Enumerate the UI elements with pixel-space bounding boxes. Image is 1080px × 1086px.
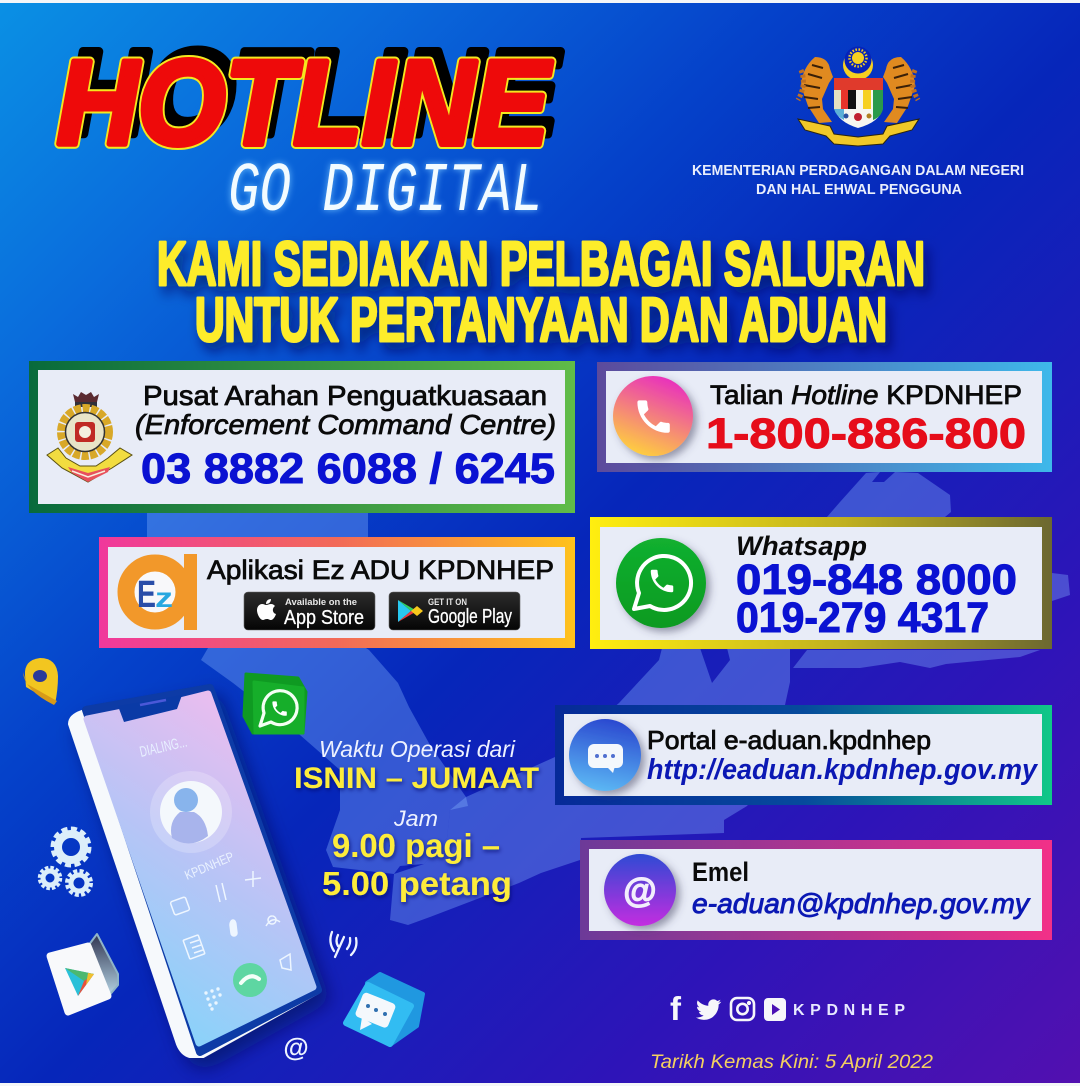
- icon: facebook: f: [670, 990, 682, 1027]
- text: centre name: Pusat Arahan Penguatkuasaan: [143, 380, 547, 411]
- text: phone numbers: 03 8882 6088 / 6245: [141, 445, 555, 493]
- text: contact name: KPDNHEP: [182, 849, 236, 883]
- icon: twitter: [696, 999, 721, 1020]
- icon: location pin: [23, 658, 58, 705]
- badge: App Store: Available on the: [285, 597, 357, 607]
- icon: email circle: [604, 854, 676, 926]
- icon: Ez ADU logo: E: [137, 574, 156, 616]
- operating hours: [294, 736, 539, 902]
- text: Jam: Jam: [393, 806, 438, 831]
- text: WhatsApp number two: 019-279 4317: [736, 594, 989, 642]
- text: WhatsApp number one: 019-848 8000: [736, 556, 1017, 604]
- icon: WhatsApp circle: [616, 538, 706, 628]
- ministry name: DAN HAL EHWAL PENGGUNA: [756, 182, 963, 198]
- icon: chat cube: [346, 974, 423, 1045]
- icon: Ez ADU logo: z: [155, 582, 173, 613]
- text: operating intro: Waktu Operasi dari: [319, 736, 516, 762]
- text: email address: e-aduan@kpdnhep.gov.my: [692, 888, 1031, 919]
- text: app name: Aplikasi Ez ADU KPDNHEP: [207, 555, 554, 585]
- subtitle: GO DIGITAL: GO DIGITAL: [228, 153, 543, 232]
- social media row: [670, 990, 905, 1027]
- text: opening time: 9.00 pagi –: [332, 827, 500, 864]
- text: email label: Emel: [692, 857, 749, 887]
- panel: enforcement command centre: [29, 361, 575, 513]
- panel: email: [580, 840, 1052, 940]
- title: HOTLINE: HOTLINE: [66, 26, 562, 160]
- icon: instagram: [731, 998, 754, 1020]
- text: centre name in English: (Enforcement Command Centre): [135, 409, 556, 440]
- text: hotline number: 1-800-886-800: [706, 410, 1026, 458]
- ministry name: KEMENTERIAN PERDAGANGAN DALAM NEGERI: [692, 163, 1024, 179]
- title: HOTLINE: HOTLINE: [57, 36, 553, 170]
- phone dial pad: [204, 987, 222, 1011]
- panel: portal: [555, 705, 1052, 805]
- badge: Google Play: [389, 592, 520, 630]
- text: WhatsApp label: Whatsapp: [736, 531, 867, 561]
- icon: chat circle: [569, 719, 641, 791]
- ministry name: [692, 163, 1024, 198]
- phone avatar: [150, 771, 232, 853]
- icon: signal antenna: [330, 932, 356, 957]
- shield: [834, 78, 883, 128]
- scroll: [798, 119, 919, 146]
- background map of Malaysia: [147, 472, 1070, 925]
- icon: at sign: @: [283, 1032, 309, 1062]
- badge: Google Play: GET IT ON: [428, 597, 467, 607]
- panel: Ez ADU app: [99, 537, 575, 648]
- phone call button: [233, 963, 267, 997]
- panel: WhatsApp: [590, 517, 1052, 649]
- icon: settings gears: [40, 829, 91, 895]
- coat of arms: [798, 46, 919, 146]
- crescent and star: [843, 46, 873, 80]
- text: hotline label: Talian Hotline KPDNHEP: [710, 380, 1022, 410]
- illustration: smartphone: [70, 688, 318, 1056]
- badge: App Store: App Store: [284, 607, 364, 629]
- phone screen: [87, 694, 313, 1043]
- heading: [157, 230, 925, 355]
- icon: WhatsApp cube: [244, 674, 306, 733]
- phone keypad controls: [170, 871, 291, 970]
- icon: enforcement badge: [47, 392, 132, 482]
- icon: Google Play cube: [50, 934, 118, 1012]
- text: dialing: DIALING...: [138, 734, 189, 761]
- icon: youtube: [764, 998, 786, 1021]
- badge: App Store: [244, 592, 375, 630]
- title: HOTLINE: HOTLINE: [57, 36, 553, 170]
- text: closing time: 5.00 petang: [322, 865, 512, 902]
- text: operating days: ISNIN – JUMAAT: [294, 762, 539, 795]
- badge: Google Play: Google Play: [428, 606, 512, 628]
- text: portal label: Portal e-aduan.kpdnhep: [647, 725, 931, 755]
- text: social handle: KPDNHEP: [793, 1002, 905, 1019]
- text: portal URL: http://eaduan.kpdnhep.gov.my: [647, 754, 1039, 786]
- icon: email circle: @: [623, 872, 657, 910]
- tiger supporters: [798, 57, 918, 123]
- icon: Ez ADU logo: [126, 554, 197, 630]
- icon: phone circle: [613, 376, 693, 456]
- text: last updated date: Tarikh Kemas Kini: 5 April 2022: [650, 1052, 933, 1073]
- panel: hotline: [597, 362, 1052, 472]
